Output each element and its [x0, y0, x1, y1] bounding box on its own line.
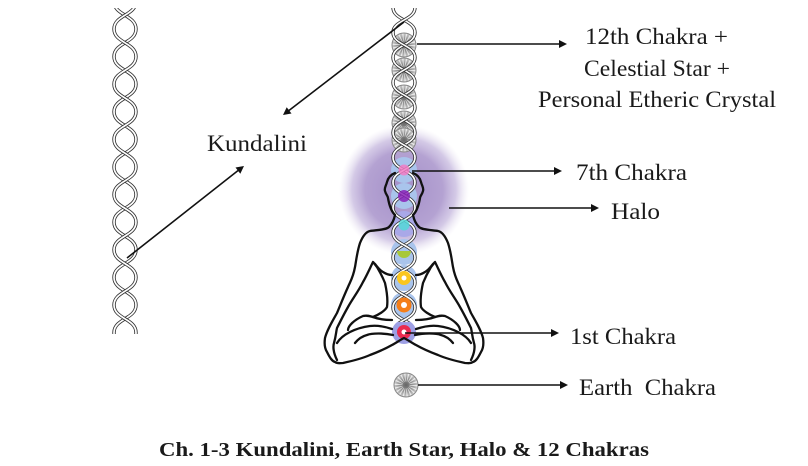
halo: [339, 125, 469, 255]
label: celestial star: Celestial Star +: [584, 56, 730, 81]
upper gray star chakras: [392, 33, 416, 152]
label: kundalini: Kundalini: [207, 131, 307, 156]
label: halo: Halo: [611, 199, 660, 224]
label: 12th chakra: 12th Chakra +: [585, 24, 728, 49]
meditating figure outline: [325, 173, 483, 363]
label: personal etheric crystal: Personal Etheric Crystal: [538, 87, 776, 112]
arrows: [127, 22, 599, 389]
coloured chakras: [396, 164, 412, 339]
label: 7th chakra: 7th Chakra: [576, 160, 687, 185]
earth chakra icon: [394, 373, 418, 397]
title: Ch. 1-3 Kundalini, Earth Star, Halo & 12 Chakras: [159, 439, 649, 461]
label: 1st chakra: 1st Chakra: [570, 324, 676, 349]
label: earth chakra: Earth Chakra: [579, 375, 716, 400]
left kundalini helix: [114, 0, 136, 388]
right helix: [393, 0, 415, 358]
light blue chakra glows: [391, 157, 417, 344]
